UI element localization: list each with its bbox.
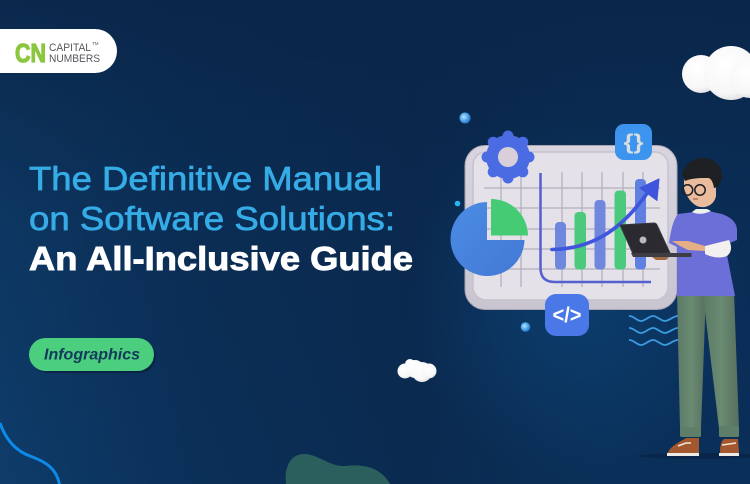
bar chart — [555, 179, 646, 270]
character — [667, 158, 739, 456]
pie chart — [451, 199, 528, 276]
trend arrow — [552, 179, 659, 250]
shoes — [667, 438, 739, 456]
shirt — [669, 211, 737, 296]
glasses — [682, 185, 705, 195]
title: on Software Solutions: — [29, 201, 395, 238]
logo badge: TM — [92, 41, 99, 46]
title: An All-Inclusive Guide — [29, 241, 413, 278]
icon: curly braces tile: {} — [624, 131, 644, 154]
logo badge — [0, 29, 117, 73]
chart grid — [484, 172, 660, 287]
logo badge: NUMBERS — [49, 53, 100, 65]
collar — [692, 209, 711, 214]
waves — [629, 316, 678, 345]
logo wordmark: CAPITAL — [49, 42, 91, 54]
decorative blue curve — [0, 423, 60, 484]
title — [29, 161, 413, 278]
hand — [672, 241, 705, 251]
neck and face — [684, 175, 716, 207]
bubbles — [455, 112, 530, 332]
logo mark: CN — [15, 38, 46, 68]
chart axis — [540, 173, 651, 282]
laptop — [620, 223, 692, 260]
decorative top blob — [228, 0, 452, 60]
title: The Definitive Manual — [29, 161, 382, 198]
trousers — [677, 292, 739, 428]
trouser cuffs — [680, 426, 739, 437]
icon: code tile — [545, 294, 589, 336]
icon: gear — [482, 130, 534, 184]
floor shadow — [638, 453, 750, 459]
mouth — [693, 198, 698, 200]
icon: code tile: </> — [552, 304, 582, 327]
tag: Infographics — [29, 338, 156, 373]
icon: curly braces tile — [615, 124, 652, 160]
large cloud — [682, 46, 750, 100]
hair — [682, 158, 722, 188]
dashboard board — [465, 146, 677, 310]
small cloud — [398, 359, 436, 382]
forearm — [705, 240, 731, 257]
decorative green blob — [286, 454, 390, 484]
tag: Infographics: Infographics — [44, 346, 140, 364]
